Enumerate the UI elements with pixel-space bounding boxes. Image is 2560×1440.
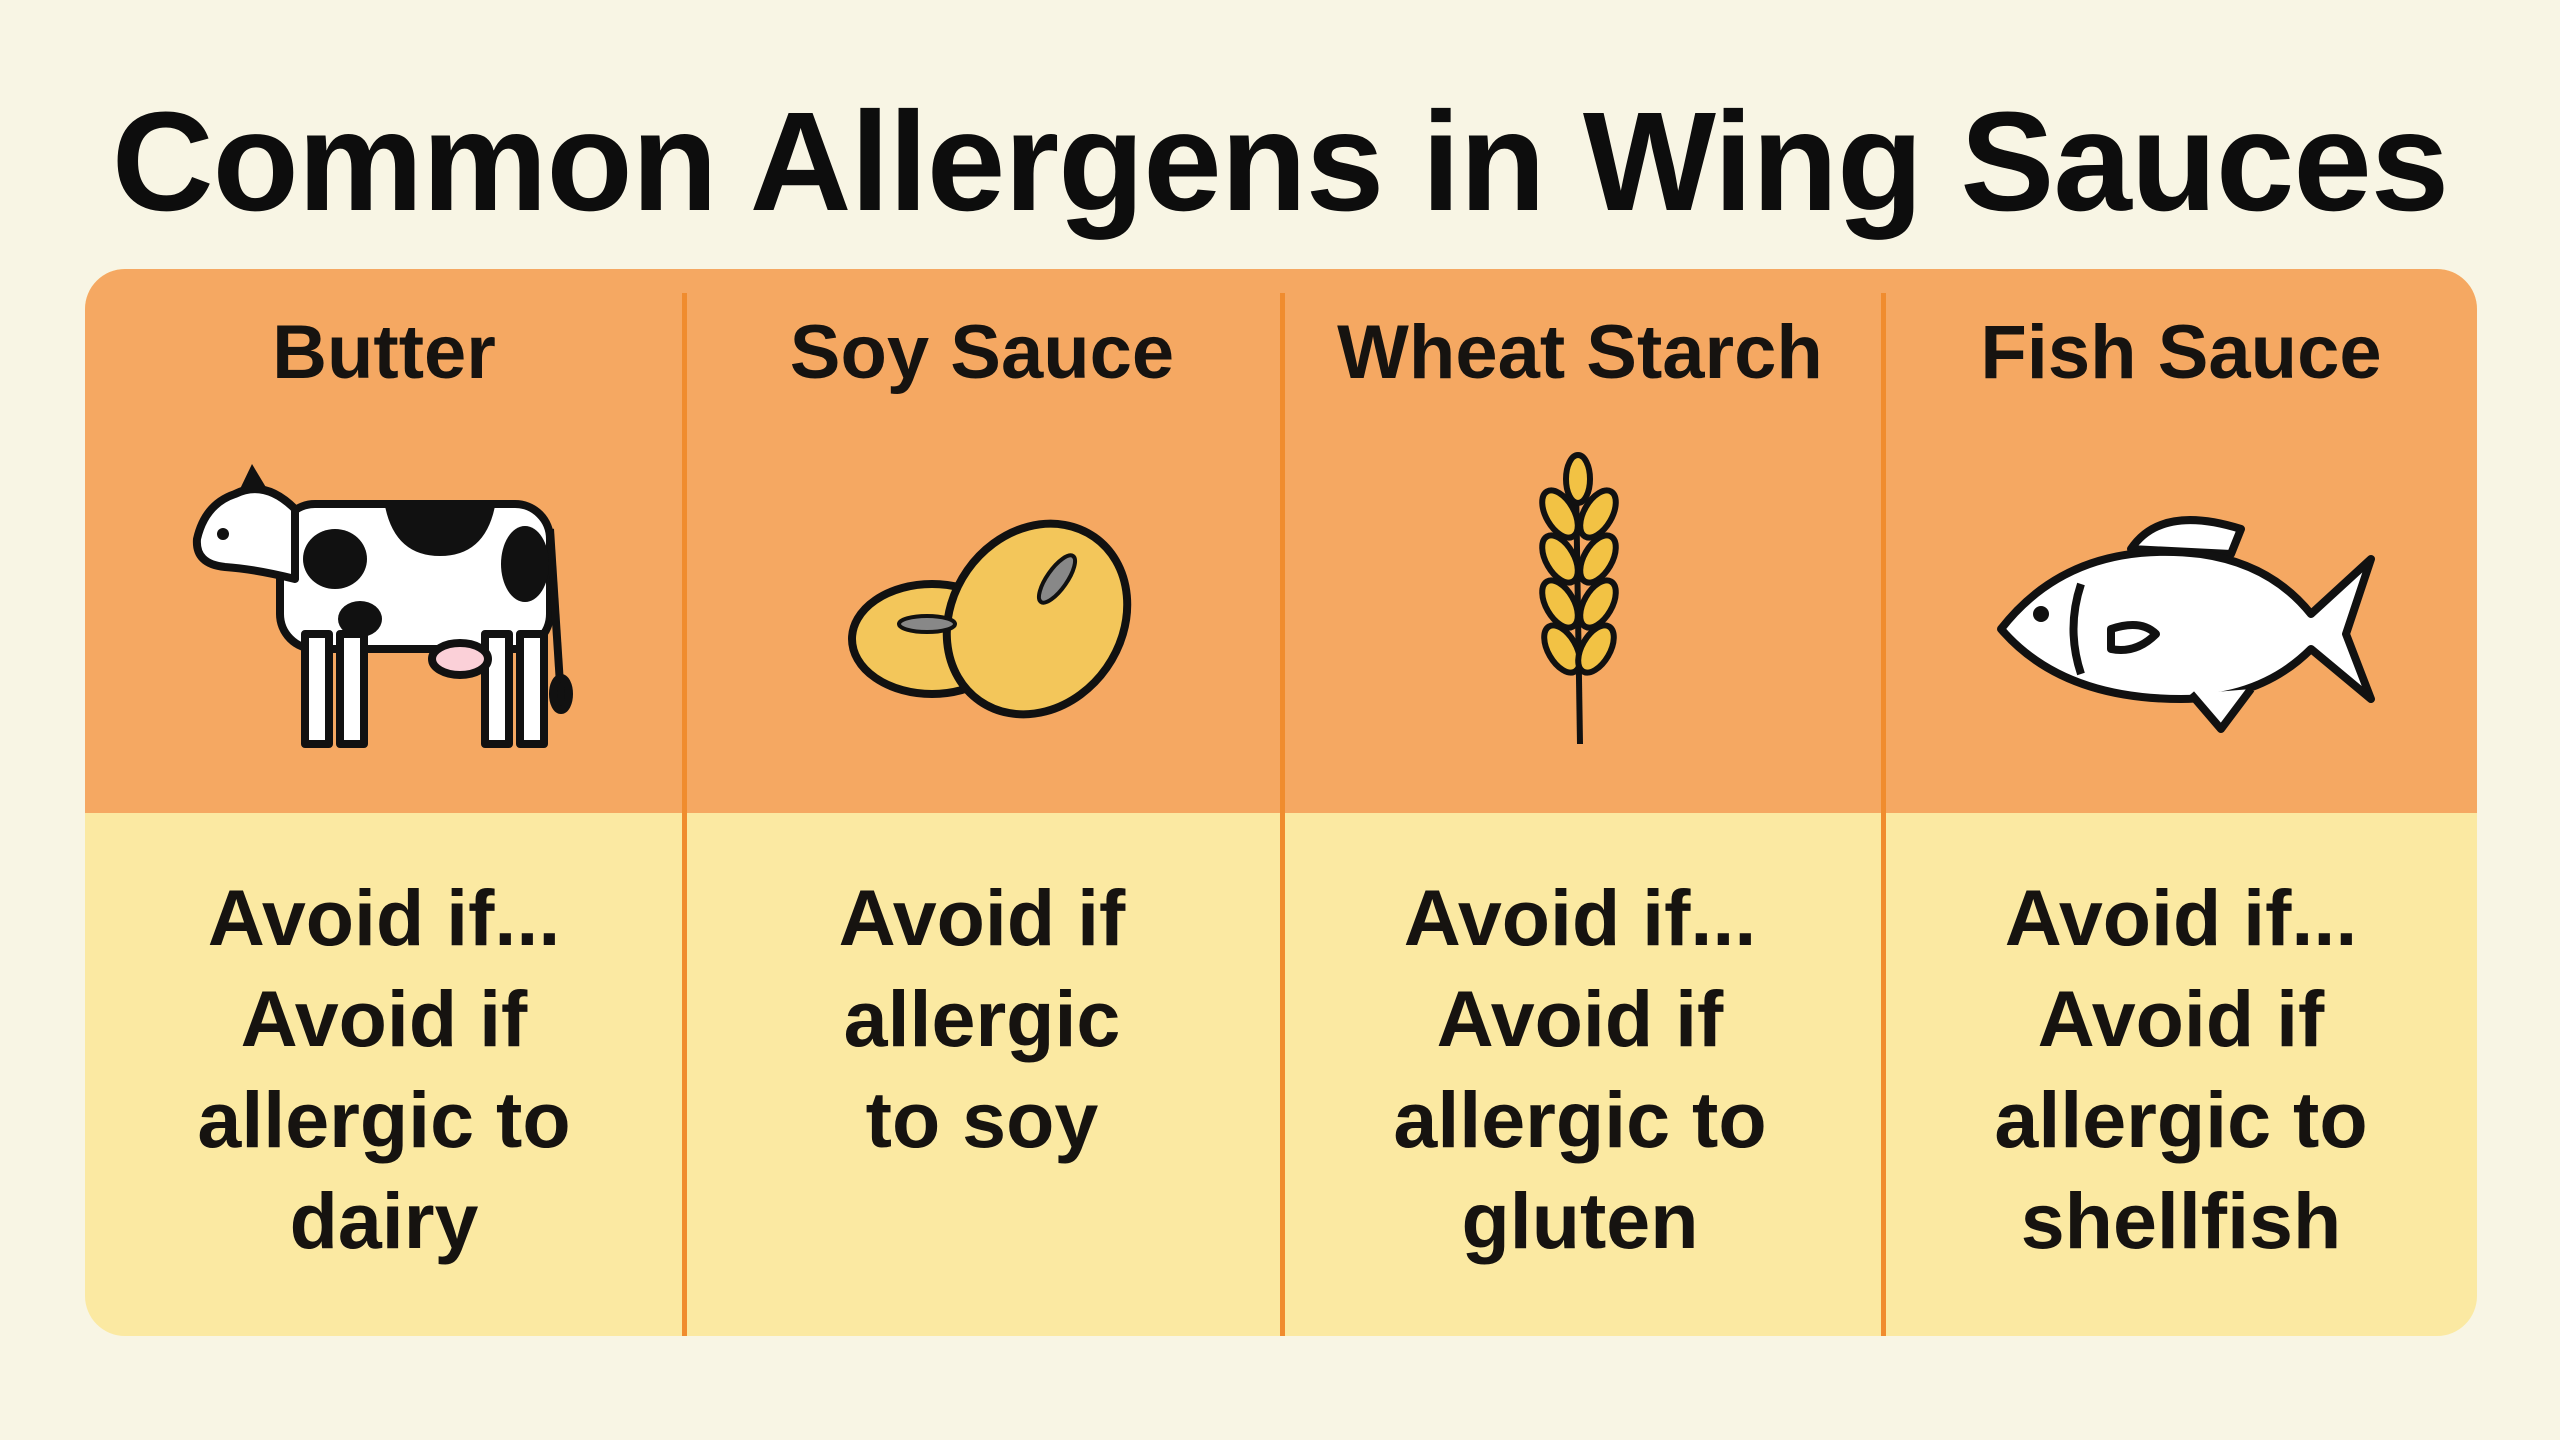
text: butter: dairy	[290, 1176, 478, 1265]
heading: soy sauce: Soy Sauce	[790, 310, 1174, 395]
text: fish sauce: shellfish	[2021, 1176, 2341, 1265]
icon: soybeans	[848, 520, 1132, 718]
text: soy sauce	[839, 873, 1126, 1164]
text: fish sauce	[1994, 873, 2368, 1265]
icon: wheat	[1539, 452, 1619, 744]
text: butter	[197, 873, 571, 1265]
text: fish sauce: allergic to	[1994, 1075, 2368, 1164]
text: wheat starch: Avoid if	[1437, 974, 1723, 1063]
text: butter: Avoid if	[241, 974, 527, 1063]
heading: wheat starch: Wheat Starch	[1337, 310, 1823, 395]
text: wheat starch	[1393, 873, 1767, 1265]
icon: cow	[192, 464, 573, 748]
heading: fish sauce: Fish Sauce	[1980, 310, 2382, 395]
text: wheat starch: allergic to	[1393, 1075, 1767, 1164]
heading: butter: Butter	[272, 310, 496, 395]
text: butter: allergic to	[197, 1075, 571, 1164]
text: butter: Avoid if...	[208, 873, 560, 962]
column: fish sauce	[1980, 310, 2382, 1265]
text: fish sauce: Avoid if	[2038, 974, 2324, 1063]
column: soy sauce	[790, 310, 1174, 1164]
text: soy sauce: allergic	[844, 974, 1120, 1063]
text: soy sauce: Avoid if	[839, 873, 1125, 962]
text: wheat starch: Avoid if...	[1404, 873, 1756, 962]
text: fish sauce: Avoid if...	[2005, 873, 2357, 962]
text: soy sauce: to soy	[866, 1075, 1098, 1164]
panel: allergen table	[85, 269, 2477, 1336]
title: Common Allergens in Wing Sauces	[112, 82, 2448, 240]
column: wheat starch	[1337, 310, 1823, 1265]
text: wheat starch: gluten	[1462, 1176, 1698, 1265]
column: butter	[192, 310, 573, 1265]
icon: fish	[1997, 516, 2375, 733]
